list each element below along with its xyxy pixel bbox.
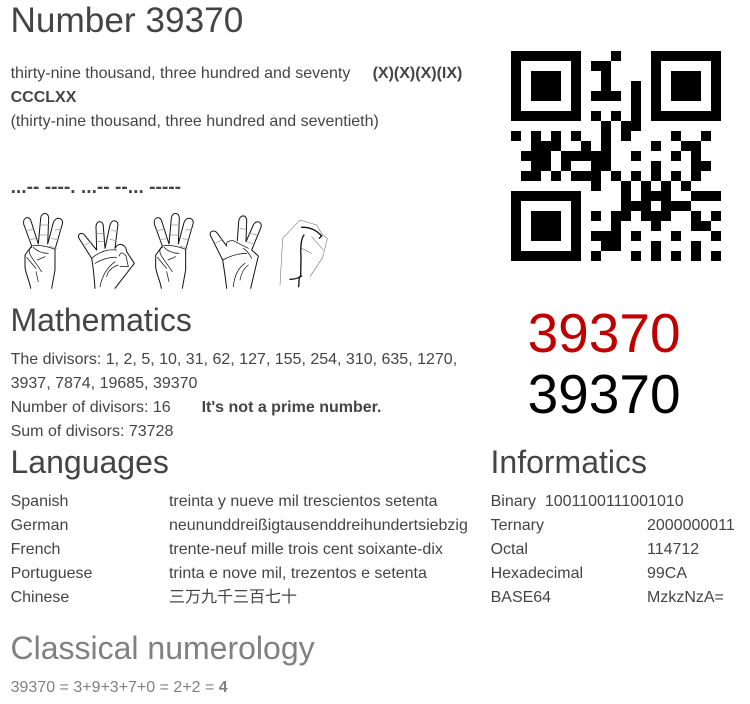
informatics table: Ternary bbox=[491, 517, 544, 534]
languages table bbox=[11, 493, 468, 606]
icon: hand sign 3 bbox=[24, 213, 63, 288]
morse code: ...-- ----. ...-- --... ----- bbox=[11, 177, 181, 198]
mathematics text block: It's not a prime number. bbox=[202, 399, 381, 416]
English cardinal and Roman numeral bbox=[10, 65, 462, 106]
informatics table: Hexadecimal bbox=[491, 565, 583, 582]
heading: Mathematics: Mathematics bbox=[10, 302, 192, 338]
QR code bbox=[511, 51, 721, 261]
informatics table: BASE64 bbox=[491, 589, 551, 606]
languages table: neununddreißigtausenddreihundertsiebzig bbox=[169, 517, 468, 534]
languages table: trente-neuf mille trois cent soixante-dix bbox=[169, 541, 443, 558]
informatics table: Octal bbox=[491, 541, 528, 558]
heading: Languages: Languages bbox=[10, 444, 169, 480]
numerology calculation: 39370 = 3+9+3+7+0 = 2+2 = 4 bbox=[11, 679, 228, 696]
informatics table: MzkzNzA= bbox=[647, 589, 724, 606]
informatics table: 114712 bbox=[647, 541, 699, 558]
informatics table: 99CA bbox=[647, 565, 687, 582]
heading: Classical numerology: Classical numerology bbox=[10, 630, 315, 666]
mathematics text block bbox=[11, 351, 457, 440]
icon: hand sign 9 bbox=[78, 221, 134, 288]
mathematics text block: 3937, 7874, 19685, 39370 bbox=[11, 375, 197, 392]
informatics table: Binary 1001100111001010 bbox=[491, 493, 684, 510]
icon: hand sign 3 bbox=[154, 213, 193, 288]
informatics table bbox=[491, 493, 735, 606]
sign language hands bbox=[23, 212, 328, 289]
English cardinal and Roman numeral: (X)(X)(X)(IX) bbox=[373, 65, 462, 82]
red number: 39370 bbox=[528, 302, 681, 364]
languages table: Chinese bbox=[11, 589, 69, 606]
icon: hand sign 7 bbox=[210, 216, 261, 288]
number in words and Roman numerals bbox=[10, 65, 462, 130]
mathematics text block: Sum of divisors: 73728 bbox=[11, 423, 173, 440]
mathematics text block: Number of divisors: 16 bbox=[11, 399, 171, 416]
mathematics text block: The divisors: 1, 2, 5, 10, 31, 62, 127, 155, 254, 310, 635, 1270, bbox=[11, 351, 457, 368]
title: Number 39370 bbox=[10, 1, 243, 40]
informatics table: 2000000011 bbox=[647, 517, 735, 534]
English cardinal and Roman numeral: CCCLXX bbox=[11, 89, 76, 106]
English cardinal and Roman numeral: thirty-nine thousand, three hundred and seventy bbox=[11, 65, 350, 82]
English ordinal: (thirty-nine thousand, three hundred and seventieth) bbox=[11, 113, 379, 130]
languages table: German bbox=[11, 517, 68, 534]
languages table: 三万九千三百七十 bbox=[169, 589, 297, 606]
heading: Informatics: Informatics bbox=[490, 444, 647, 480]
icon: hand sign 0 bbox=[280, 220, 327, 287]
languages table: trinta e nove mil, trezentos e setenta bbox=[169, 565, 427, 582]
languages table: French bbox=[11, 541, 60, 558]
languages table: treinta y nueve mil trescientos setenta bbox=[169, 493, 438, 510]
languages table: Portuguese bbox=[11, 565, 92, 582]
black number: 39370 bbox=[528, 363, 681, 425]
languages table: Spanish bbox=[11, 493, 68, 510]
